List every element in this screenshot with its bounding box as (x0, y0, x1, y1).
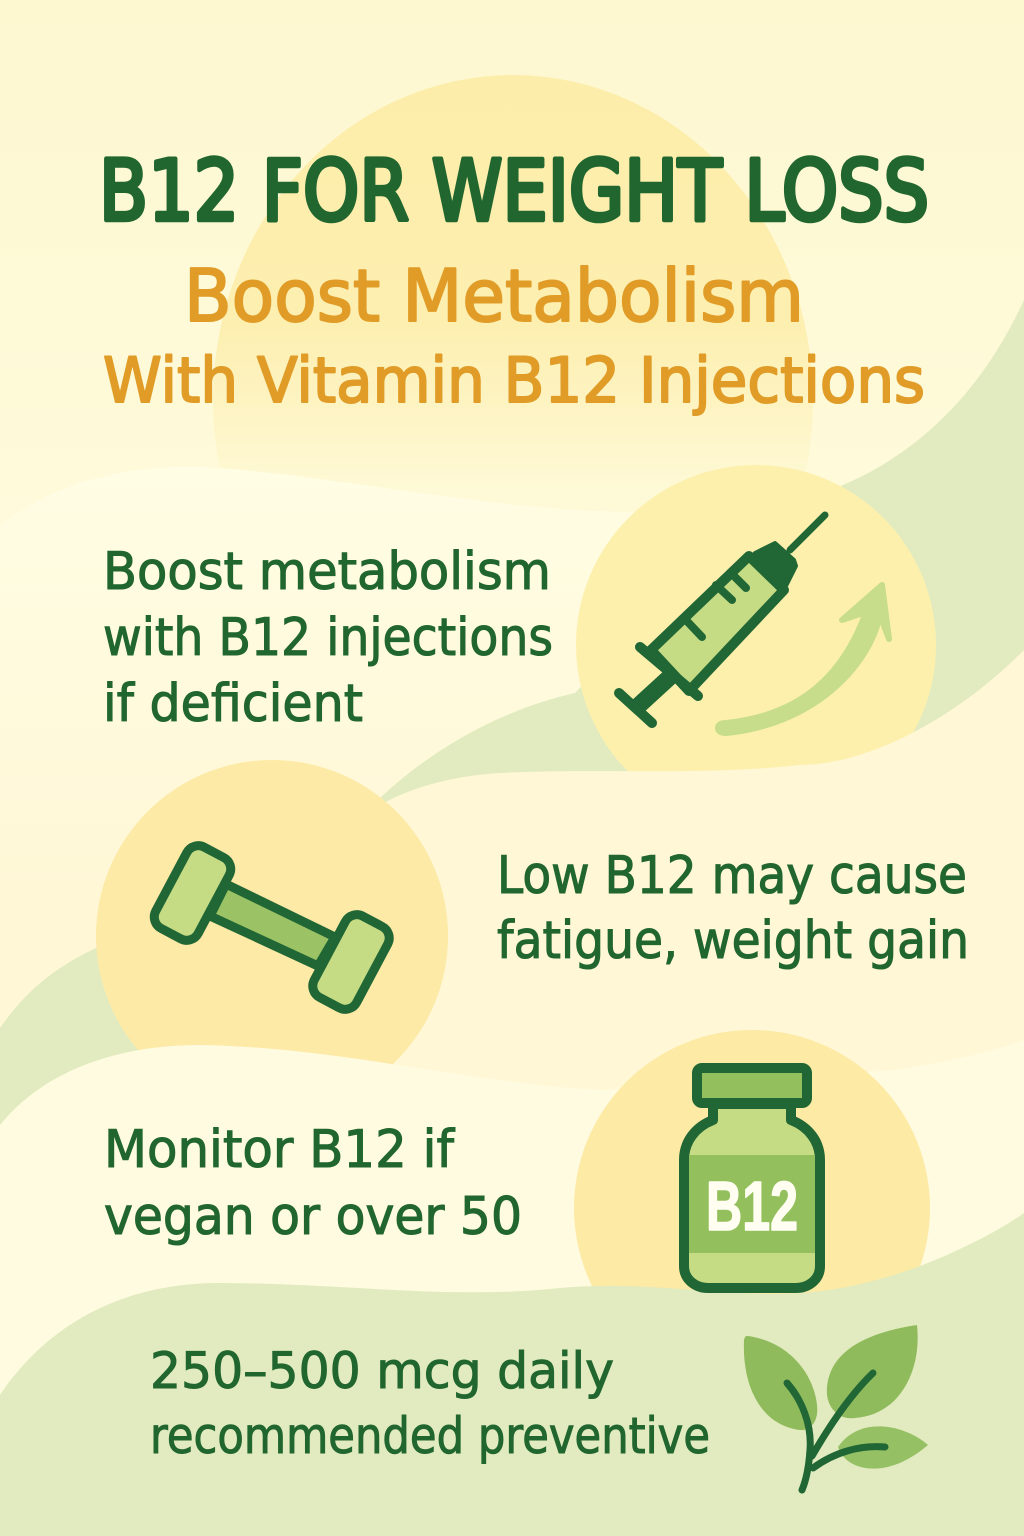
text: boost metabolism: with B12 injections (103, 608, 553, 668)
background: first cream wave (0, 467, 720, 1100)
background: bottom green wave (0, 1213, 1024, 1536)
subtitle line 2: With Vitamin B12 Injections (103, 344, 925, 417)
text: low b12: fatigue, weight gain (497, 911, 969, 971)
text: recommended dose: recommended preventive (150, 1407, 710, 1465)
text: recommended dose: 250–500 mcg daily (150, 1342, 614, 1400)
text: boost metabolism: if deficient (103, 674, 363, 734)
subtitle line 1: Boost Metabolism (184, 254, 804, 338)
background: left green wave (0, 946, 220, 1140)
icon: supplement bottle (684, 1068, 820, 1288)
icon circle: syringe backdrop (576, 465, 936, 825)
text: monitor b12: vegan or over 50 (104, 1187, 522, 1247)
icon: rising arrow (718, 585, 889, 733)
text: low b12: Low B12 may cause (497, 846, 967, 906)
background: middle cream band (250, 650, 1024, 1200)
text: boost metabolism: Boost metabolism (103, 542, 551, 602)
background: lower cream wave (0, 1040, 1024, 1420)
icon: leaves (744, 1325, 928, 1490)
icon: syringe (619, 515, 825, 723)
background: upper green wave (378, 300, 1024, 850)
icon label: B12: B12 (706, 1167, 798, 1245)
icon circle: dumbbell backdrop (96, 760, 448, 1112)
icon: dumbbell (150, 841, 394, 1014)
background: top sun circle (213, 75, 813, 725)
icon circle: bottle backdrop (574, 1030, 930, 1386)
text: monitor b12: Monitor B12 if (104, 1120, 456, 1180)
